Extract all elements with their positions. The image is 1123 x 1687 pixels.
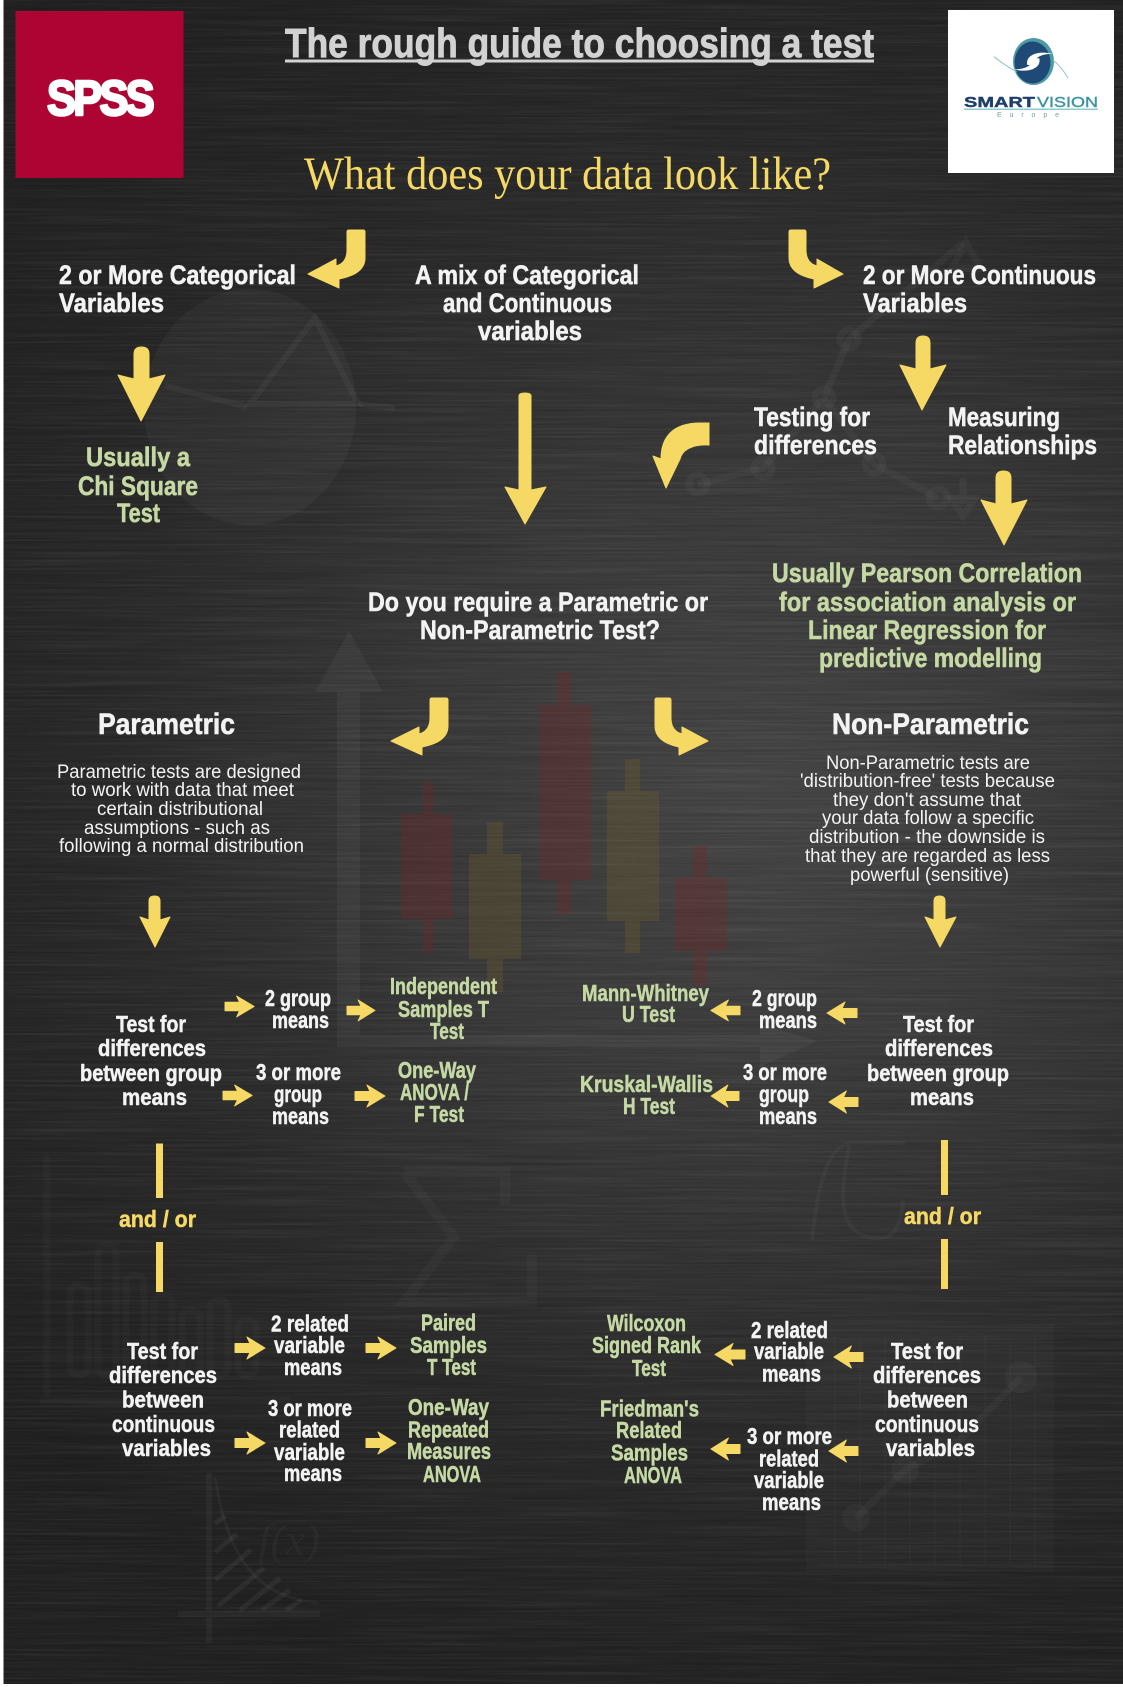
arrow: to 3 or more related variable means — [235, 1432, 265, 1454]
result: kruskal-wallis h test: Kruskal-Wallis — [580, 1071, 713, 1097]
arrow: to 2 related variable means — [235, 1337, 265, 1359]
text: 2 related variable means: 2 related — [271, 1310, 349, 1336]
text: non-parametric explanation: they don't assume that — [833, 790, 1022, 811]
question: parametric or non-parametric: Non-Parametric Test? — [420, 615, 660, 645]
text: parametric explanation: Parametric tests are designed — [57, 762, 301, 783]
text: 2 group means: means — [759, 1007, 817, 1033]
text: test for differences between group means — [80, 1011, 222, 1110]
watermark: f(x) curve: f(x) — [258, 1516, 320, 1565]
text: non-parametric explanation: distribution - the downside is — [809, 827, 1045, 848]
result: chi square test: Chi Square — [78, 471, 198, 501]
result: one-way repeated measures anova: Measures — [407, 1438, 491, 1464]
result: pearson correlation or linear regression — [772, 558, 1082, 673]
text: testing for differences — [754, 402, 877, 460]
panel: parametric group means tests — [80, 973, 497, 1129]
heading: what does your data look like: What does your data look like? — [304, 148, 831, 200]
text: measuring relationships — [948, 402, 1097, 460]
result: friedman's related samples anova: Samples — [611, 1440, 688, 1466]
text: test for differences between continuous variables: Test for — [891, 1338, 963, 1364]
text: 2 or more categorical variables: 2 or More Categorical — [59, 260, 296, 290]
text: test for differences between group means: Test for — [116, 1011, 186, 1037]
text: 3 or more related variable means: variable — [274, 1439, 345, 1465]
text: test for differences between continuous variables: Test for — [127, 1338, 198, 1364]
text: 2 or more continuous variables — [863, 260, 1096, 318]
arrow: to 3 or more related variable means — [829, 1440, 858, 1462]
text: 3 or more related variable means: variable — [754, 1467, 824, 1493]
text: 2 group means: 2 group — [265, 985, 331, 1011]
text: 3 or more related variable means: related — [279, 1416, 340, 1442]
text: 2 related variable means: means — [762, 1360, 821, 1386]
text: 2 group means: 2 group — [752, 985, 817, 1011]
text: test for differences between group means: Test for — [903, 1011, 974, 1037]
result: pearson correlation or linear regression: predictive modelling — [819, 643, 1042, 673]
question: parametric or non-parametric — [368, 587, 708, 645]
watermark: bar chart — [40, 1155, 290, 1400]
result: pearson correlation or linear regression: Usually Pearson Correlation — [772, 558, 1082, 588]
text: 3 or more group means: means — [759, 1103, 817, 1129]
text: 2 group means: means — [272, 1007, 329, 1033]
arrow: curved to parametric — [391, 698, 448, 755]
connector: left and / or — [119, 1144, 196, 1292]
watermark: grid scatter chart — [806, 1324, 1054, 1572]
arrow: curved from testing for differences — [653, 423, 709, 488]
arrow: down from non-parametric — [925, 896, 956, 947]
result: mann-whitney u test: U Test — [622, 1001, 675, 1027]
result: friedman's related samples anova — [600, 1396, 699, 1488]
arrow: down to testing and measuring — [900, 336, 946, 410]
text: 3 or more group means: 3 or more — [743, 1059, 827, 1085]
arrow: to 3 or more group means — [223, 1085, 252, 1106]
text: non-parametric explanation: Non-Parametric tests are — [826, 753, 1030, 774]
panel: non-parametric description — [800, 708, 1055, 886]
result: wilcoxon signed rank test — [592, 1310, 701, 1381]
arrow: to one-way anova — [355, 1085, 385, 1107]
arrow: down from parametric — [140, 896, 170, 947]
text: 3 or more related variable means: means — [284, 1460, 342, 1486]
text: parametric explanation: assumptions - such as — [84, 818, 270, 839]
watermark: line chart — [689, 242, 980, 516]
text: 2 related variable means: means — [284, 1354, 342, 1380]
panel: parametric continuous variable tests — [109, 1310, 491, 1487]
arrow: curved to categorical — [308, 230, 365, 288]
text: test for differences between continuous variables: variables — [886, 1435, 975, 1461]
logo: SPSS — [16, 11, 184, 178]
connector: left and / or: and / or — [119, 1206, 196, 1232]
text: 3 or more related variable means: 3 or more — [268, 1395, 352, 1421]
logo: Smart Vision Europe: Europe — [997, 112, 1059, 119]
result: paired samples t test: Samples — [410, 1332, 487, 1358]
result: mann-whitney u test — [582, 980, 709, 1027]
result: friedman's related samples anova: Related — [616, 1417, 682, 1443]
arrow: to 2 group means — [225, 996, 254, 1017]
text: 3 or more related variable means: related — [759, 1446, 819, 1472]
arrow: to kruskal-wallis — [711, 1085, 739, 1107]
watermark: pie chart — [144, 289, 395, 525]
text: 2 related variable means: variable — [754, 1338, 824, 1364]
text: 3 or more related variable means: 3 or more — [747, 1423, 832, 1449]
result: independent samples t test — [390, 973, 497, 1044]
text: parametric explanation: to work with data that meet — [71, 780, 295, 801]
text: test for differences between continuous variables — [873, 1338, 981, 1461]
text: 3 or more group means: means — [272, 1103, 329, 1129]
text: parametric explanation — [57, 762, 304, 857]
text: 2 or more continuous variables: Variables — [863, 288, 967, 318]
arrow: to 2 related variable means — [834, 1346, 863, 1368]
connector: right and / or — [904, 1140, 981, 1289]
text: non-parametric explanation: that they are regarded as less — [805, 846, 1050, 867]
question: parametric or non-parametric: Do you require a Parametric or — [368, 587, 708, 617]
result: kruskal-wallis h test: H Test — [623, 1093, 675, 1119]
text: 2 related variable means: 2 related — [751, 1317, 828, 1343]
result: friedman's related samples anova: ANOVA — [624, 1462, 682, 1488]
result: wilcoxon signed rank test: Signed Rank — [592, 1332, 701, 1358]
panel: parametric description — [57, 708, 304, 857]
text: 3 or more group means — [256, 1059, 341, 1129]
title: The rough guide to choosing a test — [285, 20, 874, 66]
arrow: to independent samples t test — [347, 1000, 375, 1021]
arrow: to mann-whitney — [711, 1000, 740, 1021]
connector: right and / or: and / or — [904, 1203, 981, 1229]
text: non-parametric explanation — [800, 753, 1055, 886]
text: 2 group means — [752, 985, 817, 1033]
result: paired samples t test — [410, 1310, 487, 1380]
result: one-way repeated measures anova: One-Way — [408, 1394, 489, 1420]
text: test for differences between continuous variables: continuous — [112, 1411, 215, 1437]
result: one-way repeated measures anova: Repeated — [408, 1416, 489, 1442]
result: independent samples t test: Independent — [390, 973, 497, 999]
arrow: to paired samples t test — [366, 1337, 396, 1359]
result: one-way anova f test: One-Way — [398, 1057, 476, 1083]
text: test for differences between group means: means — [910, 1084, 974, 1110]
text: mix of categorical and continuous: and Continuous — [443, 288, 612, 318]
text: test for differences between continuous variables: variables — [122, 1435, 211, 1461]
logo: Smart Vision Europe — [948, 10, 1114, 173]
arrow: to friedman's — [711, 1438, 740, 1460]
arrow: to 2 group means — [827, 1002, 857, 1024]
text: test for differences between group means: means — [122, 1084, 187, 1110]
result: chi square test — [78, 442, 198, 528]
text: 2 or more categorical variables — [59, 260, 296, 318]
arrow: down to pearson — [981, 471, 1027, 545]
text: testing for differences: differences — [754, 430, 877, 460]
result: one-way repeated measures anova — [407, 1394, 491, 1487]
heading: parametric: Parametric — [98, 708, 235, 741]
result: chi square test: Usually a — [86, 442, 191, 472]
result: pearson correlation or linear regression: for association analysis or — [779, 587, 1076, 617]
text: non-parametric explanation: powerful (sensitive) — [850, 865, 1009, 886]
panel: non-parametric group means tests — [580, 980, 1009, 1129]
result: independent samples t test: Test — [430, 1018, 464, 1044]
watermark: candlestick chart with axes — [315, 631, 817, 1067]
result: paired samples t test: Paired — [421, 1310, 476, 1336]
result: one-way anova f test: ANOVA / — [400, 1079, 469, 1105]
text: test for differences between group means: between group — [80, 1060, 222, 1086]
text: test for differences between continuous variables: between — [887, 1386, 968, 1412]
text: 3 or more group means: group — [759, 1081, 809, 1107]
result: pearson correlation or linear regression: Linear Regression for — [808, 615, 1046, 645]
text: non-parametric explanation: your data follow a specific — [822, 808, 1034, 829]
text: test for differences between continuous variables: continuous — [875, 1411, 979, 1437]
text: mix of categorical and continuous — [415, 260, 639, 346]
text: mix of categorical and continuous: variables — [478, 316, 582, 346]
text: 3 or more related variable means — [268, 1395, 352, 1486]
watermark: sigma symbol — [404, 1172, 532, 1302]
result: paired samples t test: T Test — [427, 1354, 476, 1380]
arrow: curved to non-parametric — [655, 698, 708, 755]
text: test for differences between continuous variables: between — [122, 1386, 204, 1412]
logo: SPSS: SPSS — [47, 72, 153, 126]
text: non-parametric explanation: 'distribution-free' tests because — [800, 771, 1055, 792]
text: testing for differences: Testing for — [754, 402, 870, 432]
result: one-way anova f test — [398, 1057, 476, 1127]
heading: non-parametric: Non-Parametric — [832, 708, 1029, 741]
text: 3 or more group means: group — [274, 1081, 322, 1107]
text: test for differences between group means: between group — [867, 1060, 1009, 1086]
text: test for differences between continuous variables: differences — [109, 1362, 217, 1388]
text: test for differences between continuous variables: differences — [873, 1362, 981, 1388]
watermark: f(x) curve — [178, 1473, 320, 1643]
panel: non-parametric continuous variable tests — [592, 1310, 981, 1515]
arrow: to one-way repeated measures anova — [366, 1432, 396, 1454]
text: mix of categorical and continuous: A mix of Categorical — [415, 260, 639, 290]
text: 2 group means — [265, 985, 331, 1033]
result: kruskal-wallis h test — [580, 1071, 713, 1119]
arrow: long down to parametric question — [505, 393, 546, 524]
text: test for differences between group means — [867, 1011, 1009, 1110]
result: wilcoxon signed rank test: Wilcoxon — [607, 1310, 686, 1336]
result: one-way anova f test: F Test — [414, 1101, 464, 1127]
text: parametric explanation: following a normal distribution — [59, 836, 304, 857]
text: 3 or more group means — [743, 1059, 827, 1129]
text: test for differences between group means: differences — [885, 1035, 993, 1061]
logo: Smart Vision Europe: VISION — [1037, 94, 1098, 111]
text: 3 or more related variable means — [747, 1423, 832, 1515]
arrow: down to chi square — [118, 347, 165, 421]
text: measuring relationships: Relationships — [948, 430, 1097, 460]
result: mann-whitney u test: Mann-Whitney — [582, 980, 709, 1006]
text: measuring relationships: Measuring — [948, 402, 1060, 432]
result: wilcoxon signed rank test: Test — [632, 1355, 666, 1381]
result: one-way repeated measures anova: ANOVA — [423, 1461, 481, 1487]
arrow: to wilcoxon — [715, 1344, 745, 1366]
arrow: curved to continuous — [789, 230, 843, 288]
result: friedman's related samples anova: Friedman's — [600, 1396, 699, 1422]
text: test for differences between continuous variables — [109, 1338, 217, 1461]
text: test for differences between group means: differences — [98, 1035, 206, 1061]
text: 2 related variable means — [751, 1317, 828, 1386]
text: 3 or more group means: 3 or more — [256, 1059, 341, 1085]
result: chi square test: Test — [117, 498, 160, 528]
text: 2 related variable means: variable — [274, 1332, 345, 1358]
arrow: to 3 or more group means — [829, 1091, 858, 1113]
watermark: pi symbol — [812, 1143, 905, 1240]
text: 3 or more related variable means: means — [762, 1489, 821, 1515]
text: 2 related variable means — [271, 1310, 349, 1380]
logo: Smart Vision Europe: SMART — [964, 94, 1035, 111]
text: parametric explanation: certain distributional — [97, 799, 263, 820]
text: 2 or more categorical variables: Variables — [59, 288, 164, 318]
result: independent samples t test: Samples T — [398, 996, 489, 1022]
